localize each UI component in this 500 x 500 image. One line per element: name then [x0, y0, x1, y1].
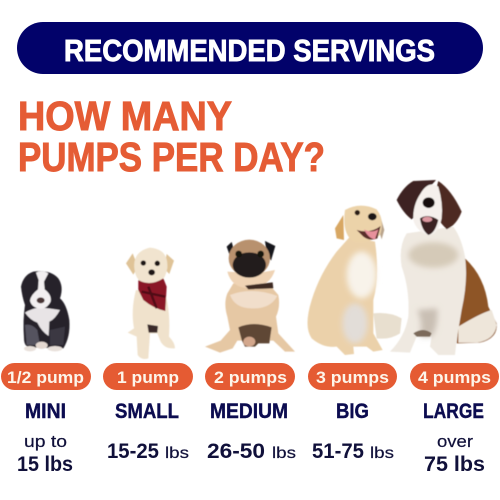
- weight: over 75 lbs: 75 lbs: [424, 453, 485, 476]
- weight: 26-50 lbs: lbs: [272, 445, 296, 462]
- weight: over 75 lbs: over: [437, 432, 473, 451]
- weight: 26-50 lbs: [207, 440, 296, 463]
- icon: small poodle with red bandana: [126, 248, 175, 359]
- weight: up to 15 lbs: up to: [24, 432, 67, 451]
- weight: 15-25 lbs: [107, 440, 189, 463]
- pill: three pumps: [308, 363, 397, 390]
- pill: two pumps: [205, 363, 295, 390]
- label: small: SMALL: [115, 400, 179, 423]
- weight: 51-75 lbs: [312, 440, 394, 463]
- banner: recommended servings: [17, 22, 483, 74]
- pill: two pumps: 2 pumps: [214, 368, 287, 387]
- label: medium: MEDIUM: [210, 400, 288, 423]
- weight: 26-50 lbs: 26-50: [207, 440, 265, 463]
- weight: over 75 lbs: [424, 432, 485, 476]
- weight: 15-25 lbs: 15-25: [107, 440, 159, 463]
- heading: how many pumps per day: HOW MANY: [18, 93, 232, 139]
- weight: up to 15 lbs: [17, 432, 73, 476]
- label: mini: MINI: [25, 400, 66, 423]
- weight: up to 15 lbs: 15 lbs: [17, 453, 73, 476]
- weight: 15-25 lbs: lbs: [165, 445, 189, 462]
- heading: how many pumps per day: [18, 93, 325, 180]
- heading: how many pumps per day: PUMPS PER DAY?: [18, 134, 325, 180]
- icon: large saint bernard: [390, 180, 497, 355]
- icon: medium pug: [205, 240, 295, 353]
- pill: one half pump: [1, 363, 91, 390]
- pill: four pumps: 4 pumps: [418, 368, 491, 387]
- pill: three pumps: 3 pumps: [316, 368, 389, 387]
- icon: mini puppy: [21, 271, 70, 351]
- icon: big labrador: [307, 206, 402, 355]
- label: large: LARGE: [423, 400, 484, 423]
- weight: 51-75 lbs: lbs: [370, 445, 394, 462]
- pill: one pump: 1 pump: [117, 368, 179, 387]
- pill: four pumps: [410, 363, 499, 390]
- label: big: BIG: [336, 400, 369, 423]
- pill: one pump: [103, 363, 193, 390]
- banner: recommended servings: RECOMMENDED SERVINGS: [64, 33, 435, 68]
- pill: one half pump: 1/2 pump: [7, 368, 84, 387]
- weight: 51-75 lbs: 51-75: [312, 440, 364, 463]
